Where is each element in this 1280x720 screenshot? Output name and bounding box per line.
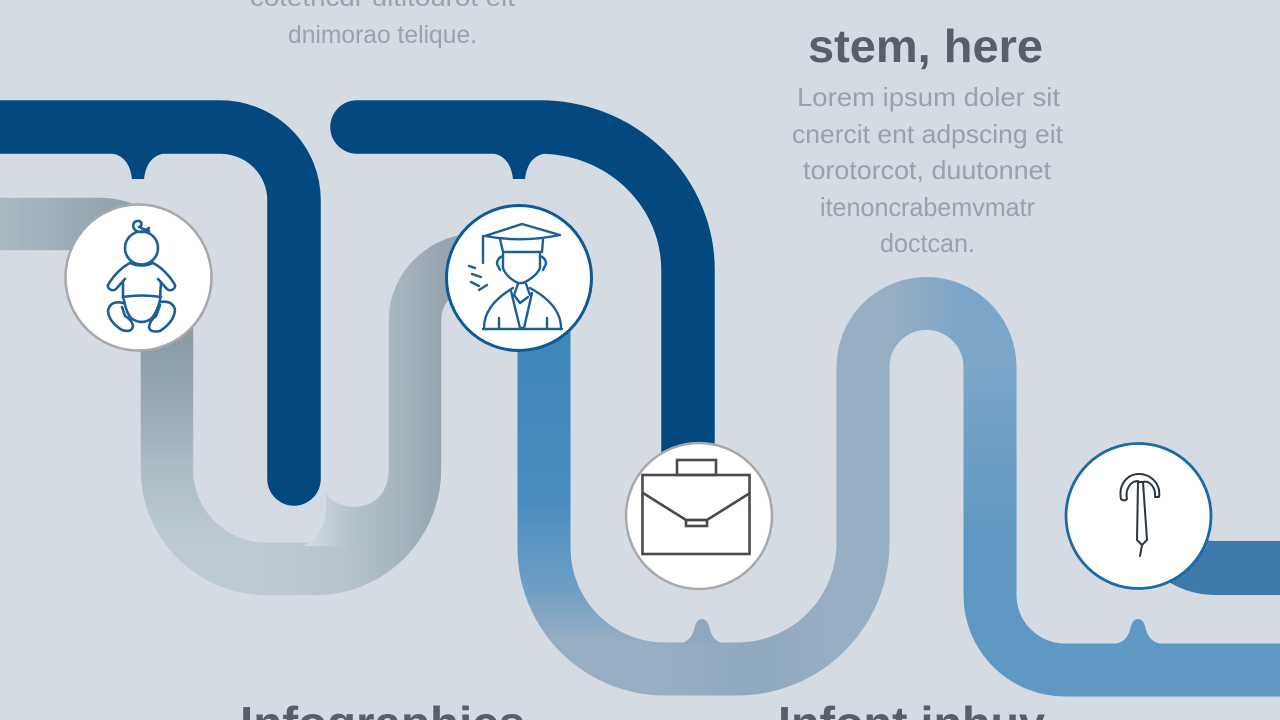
- icon: hook pin: [1066, 444, 1211, 588]
- text block: right description: torotorcot, duutonnet: [803, 155, 1052, 185]
- connector tab: dark second: [487, 153, 551, 179]
- connector tab: mid blue right: [1113, 619, 1163, 644]
- pipe: dark blue first: [0, 127, 294, 479]
- connector tab: mid blue left: [677, 619, 727, 644]
- text block: top left fragment: [250, 0, 515, 49]
- heading: stem, here: stem, here: [808, 20, 1043, 72]
- text block: right description: doctcan.: [880, 228, 975, 258]
- pipe: steel blue exit: [1160, 520, 1280, 568]
- icon: briefcase: [626, 443, 772, 589]
- icon: baby: [66, 204, 212, 350]
- connector tab: dark first: [106, 153, 170, 179]
- text block: right description: [792, 82, 1064, 258]
- icon: graduate: [446, 206, 592, 350]
- pipe: grey segment: [0, 224, 520, 569]
- text block: right description: itenoncrabemvmatr: [820, 192, 1035, 222]
- text block: right description: cnercit ent adpscing eit: [792, 119, 1064, 149]
- pipe: dark blue second: [357, 127, 688, 480]
- pipe: mid blue segment: [544, 304, 1280, 670]
- text block: right description: Lorem ipsum doler sit: [797, 82, 1061, 112]
- text block: top left fragment: dnimorao telique.: [288, 21, 477, 49]
